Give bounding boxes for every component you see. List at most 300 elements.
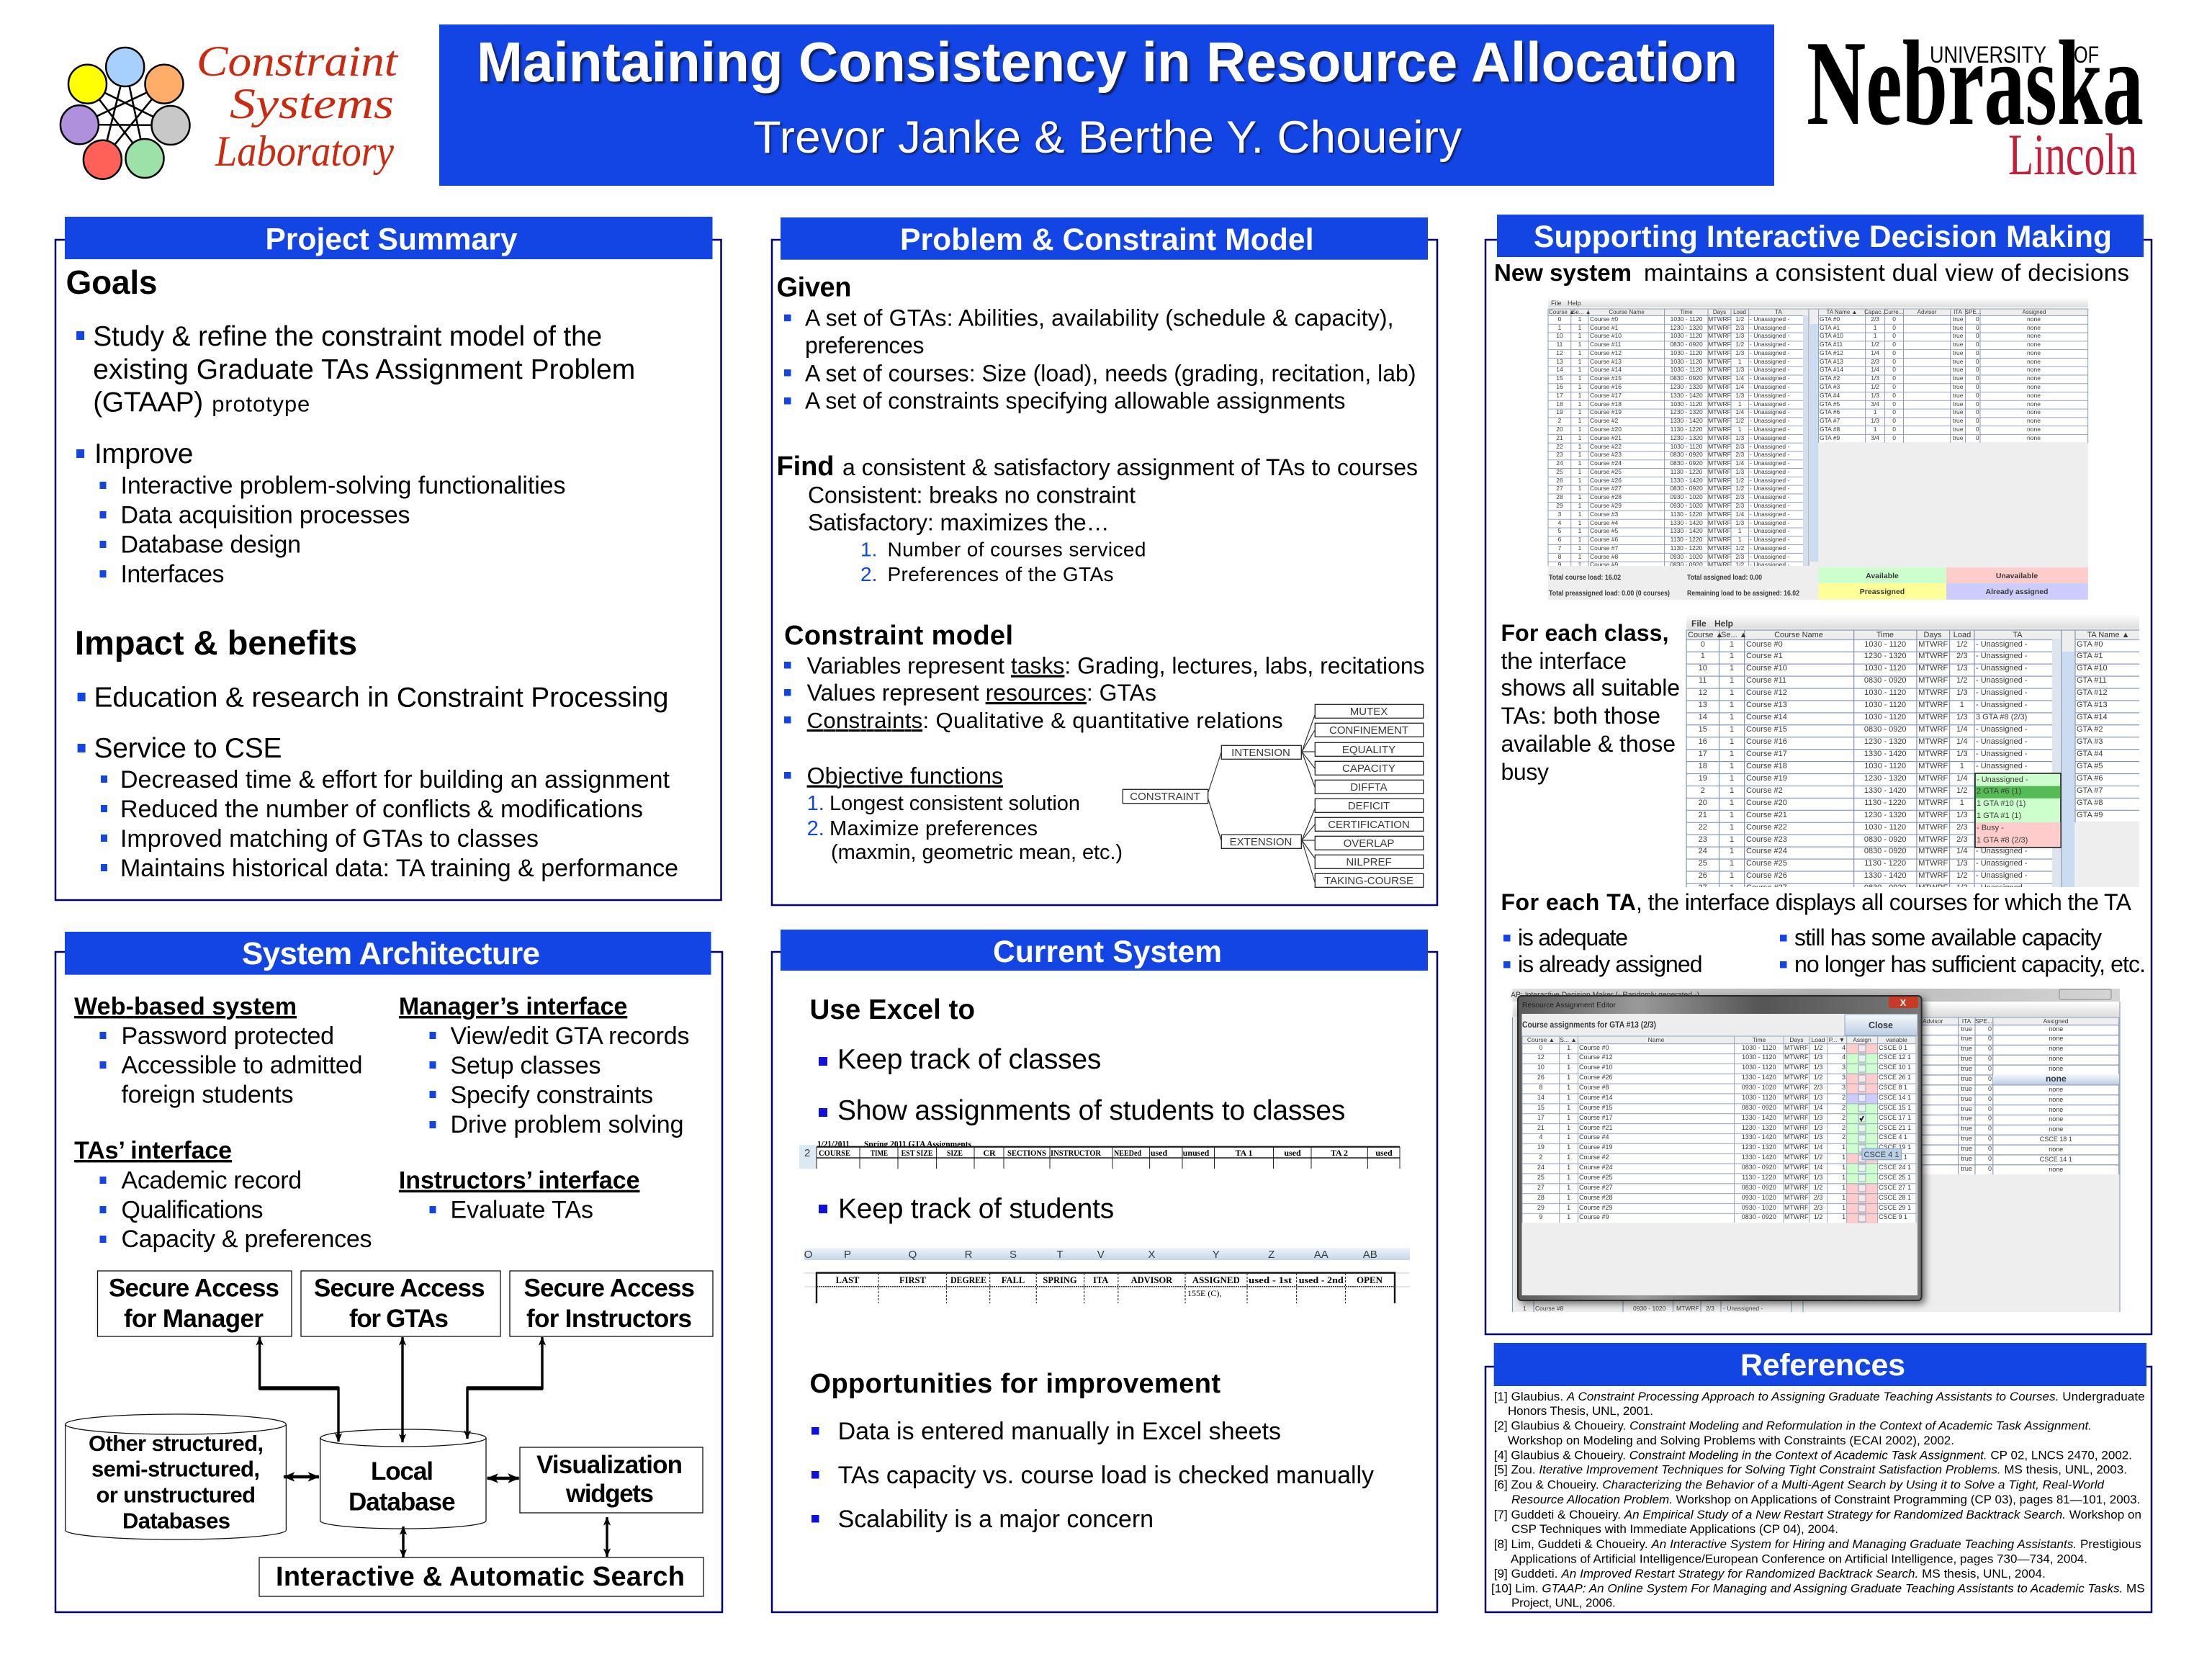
screenshot: dual view interface: Se... ▲	[1572, 309, 1591, 315]
dialog window: CSCE 0 1 CSCE 12 1 CSCE 10 1 CSCE 26 1 CSCE 8 1 CSCE 14 1 CSCE 15 1 CSCE 17 1 CSCE 21 1 CSCE 4 1 CSCE 19 1 CSCE 2 1 CSCE 24 1 CSCE 25 1 CSCE 27 1 CSCE 28 1 CSCE 29 1 CSCE 9 1	[1879, 1044, 1911, 1220]
legend: cell colours: Already assigned	[1986, 588, 2048, 596]
text block: constraint model: Variables represent tasks: Grading, lectures, labs, recitations	[807, 652, 1425, 678]
text block: constraint model: (maxmin, geometric mean, etc.)	[831, 841, 1123, 864]
reference list: Honors Thesis, UNL, 2001.	[1508, 1404, 1653, 1418]
dialog window: Load	[1812, 1036, 1825, 1043]
text: for each TA: still has some available capacity	[1794, 925, 2102, 950]
screenshot: course table with TA dropdown: TA Name ▲	[2087, 631, 2129, 639]
chart: constraint taxonomy tree: OVERLAP	[1344, 837, 1394, 850]
screenshot: excel sheet of students: Z	[1268, 1249, 1274, 1261]
text block: constraint model: Maximize preferences	[830, 817, 1038, 840]
screenshot: resource assignment editor: none none none none none none none none none none none CSCE 18 1 none CSCE 14 1 none	[2040, 1025, 2072, 1173]
text block: instructors' interface: Instructors’ interface	[399, 1167, 639, 1195]
text: for each TA: is adequate	[1518, 925, 1628, 950]
screenshot: excel sheet of students: P	[844, 1249, 851, 1261]
panel: references	[1485, 1343, 2152, 1612]
screenshot: dual view interface: 2/3 1 1 1/2 1/4 2/3 1/4 1/3 1/2 1/3 3/4 1 1/3 1 3/4	[1871, 315, 1879, 441]
screenshot: course table with TA dropdown: Course Name	[1774, 631, 1823, 639]
dialog window: 1 1 1 1 1 1 1 1 1 1 1 1 1 1 1 1 1 1	[1567, 1044, 1570, 1220]
reference list: Workshop on Modeling and Solving Problems with Constraints (ECAI 2002), 2002.	[1508, 1434, 1954, 1447]
screenshot: course table with TA dropdown: 0 1 10 11 12 13 14 15 16 17 18 19 2 20 21 22 23 24 25 26 27	[1699, 639, 1707, 887]
text block: given: preferences	[805, 333, 925, 359]
dialog window: Course assignments for GTA #13 (2/3)	[1522, 1021, 1656, 1030]
screenshot: dual view interface	[1548, 297, 2088, 600]
screenshot: dual view interface: File	[1551, 300, 1562, 307]
chart: constraint taxonomy tree	[1123, 704, 1424, 887]
text block: goals: existing Graduate TAs Assignment Problem	[93, 354, 635, 385]
screenshot: course table with TA dropdown: GTA #0 GTA #1 GTA #10 GTA #11 GTA #12 GTA #13 GTA #14 GTA #2 GTA #3 GTA #4 GTA #5 GTA #6 GTA #7 GTA #8 GTA #9	[2077, 639, 2108, 819]
screenshot: excel sheet of students: O	[804, 1249, 812, 1261]
box: secure access for manager: Secure Access	[109, 1274, 279, 1303]
reference list: Project, UNL, 2006.	[1511, 1596, 1616, 1610]
screenshot: course table with TA dropdown: Days	[1923, 631, 1942, 639]
screenshot: course table with TA dropdown: File	[1691, 619, 1707, 629]
text block: goals	[66, 264, 635, 588]
text block: impact and benefits: Education & research in Constraint Processing	[94, 683, 668, 713]
text block: find: a consistent & satisfactory assignment of TAs to courses	[842, 454, 1418, 480]
text: keep track of students: Keep track of students	[838, 1194, 1114, 1225]
text block: TAs interface: Capacity & preferences	[121, 1226, 372, 1253]
reference list: [9] Guddeti. An Improved Restart Strategy for Randomized Backtrack Search. MS thesis, UNL, 2004.	[1494, 1567, 2046, 1581]
cylinder: other databases: or unstructured	[96, 1483, 256, 1508]
text block: goals: Improve	[94, 439, 193, 469]
screenshot: course table with TA dropdown: 1030 - 1120 1230 - 1320 1030 - 1120 0830 - 0920 1030 - 1120 1030 - 1120 1030 - 1120 0830 - 0920 1230 - 1320 1330 - 1420 1030 - 1120 1230 - 1320 1330 - 1420 1130 - 1220 1230 - 1320 1030 - 1120 0830 - 0920 0830 - 0920 1130 - 1220 1330 - 1420 0830 - 0920	[1864, 639, 1907, 887]
text block: goals: Interfaces	[121, 561, 225, 588]
text block: web-based system: Password protected	[121, 1022, 334, 1050]
screenshot: resource assignment editor: MTWRF	[1676, 1305, 1699, 1312]
dialog window: variable	[1886, 1036, 1907, 1043]
text block: impact and benefits: Service to CSE	[94, 733, 282, 764]
panel: system architecture	[55, 932, 722, 1612]
screenshot: resource assignment editor	[1511, 989, 2120, 1312]
lab name: Constraint	[197, 37, 398, 85]
screenshot: resource assignment editor: 2/3	[1706, 1305, 1714, 1312]
reference list: [4] Glaubius & Choueiry. Constraint Modeling in the Context of Academic Task Assignment. CP 02, LNCS 2470, 2002.	[1494, 1449, 2132, 1462]
screenshot: dual view interface: ITA	[1954, 309, 1963, 315]
panel: current system	[772, 930, 1437, 1612]
text block: find: Find	[776, 451, 834, 482]
screenshot: dual view interface: Total assigned load: 0.00	[1687, 573, 1762, 582]
text block: goals: (GTAAP)	[93, 387, 203, 418]
text: for each class: available & those	[1501, 731, 1676, 757]
box: interactive and automatic search: Interactive & Automatic Search	[276, 1562, 685, 1592]
text block: given	[776, 273, 1416, 414]
text: for each class: shows all suitable	[1501, 675, 1680, 701]
text block: constraint model: 1.	[807, 792, 824, 815]
chart: constraint taxonomy tree: EXTENSION	[1230, 836, 1292, 848]
text block: manager's interface: Specify constraints	[451, 1082, 653, 1109]
text block: opportunities for improvement: Scalability is a major concern	[838, 1506, 1154, 1533]
chart: constraint taxonomy tree: CAPACITY	[1342, 763, 1395, 775]
chart: constraint taxonomy tree: DEFICIT	[1348, 800, 1390, 812]
screenshot: dual view interface: none none none none none none none none none none none none none none none	[2027, 315, 2041, 441]
reference list: [8] Lim, Guddeti & Choueiry. An Interactive System for Hiring and Managing Graduate Teaching Assistants. Prestigious	[1494, 1537, 2141, 1551]
screenshot: dual view interface: 0 0 0 0 0 0 0 0 0 0 0 0 0 0 0	[1892, 315, 1896, 441]
chart: constraint taxonomy tree: TAKING-COURSE	[1324, 875, 1413, 887]
text: for each TA: no longer has sufficient capacity, etc.	[1794, 951, 2146, 977]
box: secure access for GTAs	[301, 1271, 500, 1336]
logo: university of nebraska lincoln	[1807, 15, 2144, 187]
screenshot: excel sheet of classes: TIME	[871, 1148, 888, 1158]
text block: TAs interface	[74, 1137, 372, 1253]
screenshot: dual view interface: true true true true true true true true true true true true true true true	[1953, 315, 1964, 441]
text block: manager's interface: View/edit GTA records	[451, 1022, 690, 1050]
lab name: Laboratory	[215, 127, 394, 175]
reference list: [6] Zou & Choueiry. Characterizing the Behavior of a Multi-Agent Search by Using it to Solve a Tight, Real-World	[1494, 1478, 2105, 1492]
screenshot: dual view interface: Course ▲	[1549, 309, 1575, 315]
screenshot: course table with TA dropdown: Time	[1876, 631, 1894, 639]
box: secure access for GTAs: for GTAs	[349, 1305, 449, 1333]
screenshot: resource assignment editor: 1	[1523, 1305, 1527, 1312]
text block: web-based system: Accessible to admitted	[121, 1052, 363, 1079]
reference list: [2] Glaubius & Choueiry. Constraint Modeling and Reformulation in the Context of Academic Task Assignment.	[1494, 1419, 2092, 1433]
text block: opportunities for improvement: TAs capacity vs. course load is checked manually	[838, 1462, 1374, 1489]
screenshot: dual view interface: MTWRF MTWRF MTWRF MTWRF MTWRF MTWRF MTWRF MTWRF MTWRF MTWRF MTWRF MTWRF MTWRF MTWRF MTWRF MTWRF MTWRF MTWRF MTWRF MTWRF MTWRF MTWRF MTWRF MTWRF MTWRF MTWRF MTWRF MTWRF MTWRF MTWRF	[1708, 315, 1731, 566]
text block: goals: Study & refine the constraint model of the	[93, 321, 602, 352]
box: visualization widgets: widgets	[565, 1480, 654, 1508]
heading: problem and constraint model: Problem & Constraint Model	[900, 223, 1313, 257]
screenshot: resource assignment editor: SPE...	[1975, 1017, 1992, 1025]
text block: manager's interface: Setup classes	[451, 1052, 601, 1079]
dialog window: 1030 - 1120 1030 - 1120 1030 - 1120 1330 - 1420 0930 - 1020 1030 - 1120 0830 - 0920 1330 - 1420 1230 - 1320 1330 - 1420 1230 - 1320 1330 - 1420 0830 - 0920 1130 - 1220 0830 - 0920 0930 - 1020 0930 - 1020 0830 - 0920	[1742, 1044, 1776, 1220]
screenshot: excel sheet of students: T	[1056, 1249, 1064, 1261]
reference list	[1491, 1390, 2145, 1610]
text block: find: 2.	[860, 563, 877, 585]
screenshot: dual view interface: 1/2 2/3 1/3 1/2 1/3 1 1/3 1/4 1/4 1/3 1 1/4 1/2 1 1/3 2/3 2/3 1/4 1/3 1/2 1/2 2/3 2/3 1/4 1/3 1 1 1/2 2/3 1/2	[1735, 315, 1744, 566]
text block: goals: prototype	[212, 392, 310, 417]
screenshot: excel sheet of classes: used	[1151, 1148, 1167, 1158]
screenshot: excel sheet of classes: COURSE	[819, 1148, 850, 1158]
text: for each class: TAs: both those	[1501, 703, 1660, 729]
screenshot: dual view interface: Course #0 Course #1 Course #10 Course #11 Course #12 Course #13 Course #14 Course #15 Course #16 Course #17 Course #18 Course #19 Course #2 Course #20 Course #21 Course #22 Course #23 Course #24 Course #25 Course #26 Course #27 Course #28 Course #29 Course #3 Course #4 Course #5 Course #6 Course #7 Course #8 Course #9	[1590, 315, 1622, 566]
text block: impact and benefits	[75, 624, 678, 882]
dialog window: Close	[1869, 1020, 1893, 1030]
diagram: system architecture flow	[66, 1271, 713, 1596]
screenshot: excel sheet of classes: INSTRUCTOR	[1051, 1148, 1101, 1158]
screenshot: dual view interface: Assigned	[2023, 309, 2046, 315]
screenshot: excel sheet of students: AB	[1363, 1249, 1377, 1261]
panel: problem and constraint model	[772, 217, 1437, 905]
screenshot: dual view interface: 1030 - 1120 1230 - 1320 1030 - 1120 0830 - 0920 1030 - 1120 1030 - 1120 1030 - 1120 0830 - 0920 1230 - 1320 1330 - 1420 1030 - 1120 1230 - 1320 1330 - 1420 1130 - 1220 1230 - 1320 1030 - 1120 0830 - 0920 0830 - 0920 1130 - 1220 1330 - 1420 0830 - 0920 0930 - 1020 0930 - 1020 1130 - 1220 1330 - 1420 1330 - 1420 1130 - 1220 1130 - 1220 0930 - 1020 0830 - 0920	[1670, 315, 1703, 566]
screenshot: excel sheet of students: ITA	[1093, 1275, 1108, 1285]
dialog window: 4 4 3 3 3 2 2 2 2 2 1 1 1 1 1 1 1 1	[1842, 1044, 1845, 1220]
text block: impact and benefits: Reduced the number of conflicts & modifications	[120, 796, 643, 823]
box: secure access for instructors: Secure Access	[524, 1274, 695, 1303]
text block: find: Consistent: breaks no constraint	[808, 482, 1136, 508]
heading: system architecture: System Architecture	[242, 936, 540, 971]
text block: use excel: Keep track of classes	[837, 1044, 1101, 1075]
box: secure access for GTAs: Secure Access	[314, 1274, 485, 1303]
screenshot: excel sheet of students: FIRST	[899, 1275, 926, 1285]
cylinder: local database	[320, 1429, 486, 1529]
screenshot: excel sheet of classes: used	[1284, 1148, 1301, 1158]
screenshot: dual view interface: Load	[1733, 309, 1746, 315]
cylinder: local database: Local	[371, 1457, 433, 1485]
text: for each class: For each class,	[1501, 620, 1669, 646]
dialog window	[1518, 996, 1922, 1300]
screenshot: dual view interface: Remaining load to be assigned: 16.02	[1687, 589, 1799, 598]
text block: constraint model: Constraints: Qualitative & quantitative relations	[807, 708, 1283, 733]
title: Maintaining Consistency in Resource Allocation	[477, 30, 1737, 94]
text block: use excel: Use Excel to	[809, 994, 975, 1025]
screenshot: dual view interface: TA Name ▲	[1827, 309, 1857, 315]
legend: cell colours: Unavailable	[1996, 572, 2038, 580]
screenshot: excel sheet of students: Y	[1213, 1249, 1220, 1261]
screenshot: course table with TA dropdown: Load	[1954, 631, 1971, 639]
box: secure access for instructors	[510, 1271, 713, 1336]
screenshot: excel sheet of students: V	[1097, 1249, 1105, 1261]
screenshot: dual view interface: - Unassigned - - Unassigned - - Unassigned - - Unassigned - - Unassigned - - Unassigned - - Unassigned - - Unassigned - - Unassigned - - Unassigned - - Unassigned - - Unassigned - - Unassigned - - Unassigned - - Unassigned - - Unassigned - - Unassigned - - Unassigned - - Unassigned - - Unassigned - - Unassigned - - Unassigned - - Unassigned - - Unassigned - - Unassigned - - Unassigned - - Unassigned - - Unassigned - - Unassigned - - Unassigned -	[1750, 315, 1789, 566]
text block: given: Given	[776, 273, 851, 303]
screenshot: dual view interface: SPE...	[1965, 309, 1981, 315]
screenshot: course table with TA dropdown: Course ▲	[1688, 631, 1723, 639]
title banner	[439, 24, 1774, 186]
screenshot: dual view interface: Curre...	[1884, 309, 1903, 315]
screenshot: dual view interface: Help	[1568, 300, 1581, 307]
screenshot: dual view interface: 1 1 1 1 1 1 1 1 1 1 1 1 1 1 1 1 1 1 1 1 1 1 1 1 1 1 1 1 1 1	[1578, 315, 1581, 566]
authors: Trevor Janke & Berthe Y. Choueiry	[753, 112, 1462, 163]
screenshot: excel sheet of classes: CR	[983, 1148, 996, 1158]
text block: opportunities for improvement	[809, 1369, 1374, 1533]
screenshot: course table with TA dropdown: 1/2 2/3 1/3 1/2 1/3 1 1/3 1/4 1/4 1/3 1 1/4 1/2 1 1/3 2/3 2/3 1/4 1/3 1/2 1/2	[1956, 639, 1967, 887]
screenshot: excel sheet of classes: NEEDed	[1114, 1148, 1141, 1158]
text: dual view intro: New system	[1494, 259, 1632, 286]
text block: find: Number of courses serviced	[887, 539, 1146, 561]
text block: opportunities for improvement: Opportunities for improvement	[809, 1369, 1220, 1399]
text block: impact and benefits: Improved matching of GTAs to classes	[120, 825, 539, 853]
text block: find: Preferences of the GTAs	[887, 563, 1113, 585]
panel: supporting interactive decision making	[1485, 215, 2152, 1334]
text block: use excel: Show assignments of students to classes	[837, 1095, 1345, 1126]
legend: cell colours: Preassigned	[1860, 588, 1905, 596]
text: dual view intro: maintains a consistent dual view of decisions	[1644, 259, 2129, 286]
text block: goals: Database design	[121, 531, 301, 559]
text block: instructors' interface	[399, 1167, 639, 1224]
text block: manager's interface: Manager’s interface	[399, 993, 627, 1020]
text block: use excel	[809, 994, 1345, 1126]
chart: constraint taxonomy tree: INTENSION	[1231, 747, 1290, 759]
text block: goals: Data acquisition processes	[121, 502, 410, 529]
screenshot: dual view interface: Course Name	[1609, 309, 1645, 315]
screenshot: excel sheet of classes: used	[1375, 1148, 1393, 1158]
chart: constraint taxonomy tree: CONSTRAINT	[1130, 791, 1200, 803]
screenshot: excel sheet of students: used - 1st	[1249, 1275, 1292, 1285]
assign column cell colours	[1847, 1043, 1878, 1223]
heading: references: References	[1740, 1348, 1905, 1382]
screenshot: excel sheet of students: SPRING	[1043, 1275, 1077, 1285]
logo: university of nebraska lincoln: Lincoln	[2008, 122, 2137, 187]
screenshot: course table with TA dropdown: Se... ▲	[1721, 631, 1748, 639]
box: secure access for manager: for Manager	[124, 1305, 264, 1333]
screenshot: excel sheet of students: Q	[909, 1249, 917, 1261]
dialog window: Days	[1789, 1036, 1804, 1043]
box: visualization widgets: Visualization	[536, 1451, 683, 1479]
screenshot: excel sheet of students: S	[1010, 1249, 1017, 1261]
dialog window: Name	[1648, 1036, 1665, 1043]
screenshot: excel sheet of students: ADVISOR	[1131, 1275, 1173, 1285]
text block: web-based system: foreign students	[121, 1082, 294, 1109]
screenshot: resource assignment editor: AP: Interactive Decision Maker (- Randomly generated -)	[1511, 991, 1699, 999]
text block: constraint model	[784, 621, 1425, 864]
screenshot: excel sheet of students: used - 2nd	[1299, 1275, 1344, 1285]
panel: project summary	[55, 217, 721, 900]
screenshot: excel sheet of classes: SIZE	[947, 1148, 963, 1158]
icon: constraint graph of seven coloured nodes	[60, 48, 190, 179]
reference list: CSP Techniques with Immediate Applications (CP 04), 2004.	[1511, 1522, 1838, 1536]
screenshot: excel sheet of classes: 2	[804, 1147, 810, 1159]
dialog window: 1/2 1/3 1/3 1/2 2/3 1/3 1/4 1/3 1/3 1/3 1/4 1/2 1/4 1/3 1/2 2/3 2/3 1/2	[1814, 1044, 1822, 1220]
dialog window: Time	[1753, 1036, 1766, 1043]
text block: find: Satisfactory: maximizes the…	[808, 510, 1110, 536]
screenshot: dual view interface: 0 0 0 0 0 0 0 0 0 0 0 0 0 0 0	[1976, 315, 1979, 441]
text: for each TA: is already assigned	[1518, 951, 1702, 977]
text block: given: A set of GTAs: Abilities, availability (schedule & capacity),	[805, 305, 1394, 331]
screenshot: excel sheet of students: FALL	[1002, 1275, 1025, 1285]
text block: TAs interface: Academic record	[121, 1167, 302, 1195]
screenshot: resource assignment editor: Advisor	[1923, 1017, 1943, 1025]
screenshot: excel sheet of students: AA	[1314, 1249, 1328, 1261]
screenshot: course table with TA dropdown: Course #0 Course #1 Course #10 Course #11 Course #12 Course #13 Course #14 Course #15 Course #16 Course #17 Course #18 Course #19 Course #2 Course #20 Course #21 Course #22 Course #23 Course #24 Course #25 Course #26 Course #27	[1746, 639, 1787, 887]
chart: constraint taxonomy tree: MUTEX	[1350, 706, 1388, 718]
text block: given: A set of courses: Size (load), needs (grading, recitation, lab)	[805, 360, 1416, 386]
text block: manager's interface	[399, 993, 690, 1138]
text: for each class	[1501, 620, 1680, 785]
screenshot: excel sheet of classes: TA 2	[1331, 1148, 1348, 1158]
screenshot: excel sheet of students: LAST	[836, 1275, 860, 1285]
text block: TAs interface: Qualifications	[121, 1197, 264, 1224]
text block: constraint model: Objective functions	[807, 763, 1003, 789]
screenshot: dual view interface: Total preassigned load: 0.00 (0 courses)	[1549, 589, 1670, 598]
text block: web-based system: Web-based system	[74, 993, 297, 1020]
screenshot: course table with TA dropdown: MTWRF MTWRF MTWRF MTWRF MTWRF MTWRF MTWRF MTWRF MTWRF MTWRF MTWRF MTWRF MTWRF MTWRF MTWRF MTWRF MTWRF MTWRF MTWRF MTWRF MTWRF	[1918, 639, 1948, 887]
dialog window: Assign	[1853, 1036, 1871, 1043]
screenshot: resource assignment editor: 0 0 0 0 0 0 0 0 0 0 0 0 0 0 0	[1988, 1025, 1992, 1172]
dialog window: Course #0 Course #12 Course #10 Course #26 Course #8 Course #14 Course #15 Course #17 Course #21 Course #4 Course #19 Course #2 Course #24 Course #25 Course #27 Course #28 Course #29 Course #9	[1579, 1044, 1613, 1220]
dialog window: MTWRF MTWRF MTWRF MTWRF MTWRF MTWRF MTWRF MTWRF MTWRF MTWRF MTWRF MTWRF MTWRF MTWRF MTWRF MTWRF MTWRF MTWRF	[1784, 1044, 1809, 1220]
text block: constraint model: Values represent resources: GTAs	[807, 680, 1156, 706]
screenshot: excel sheet of classes: TA 1	[1235, 1148, 1253, 1158]
dialog window: Course ▲	[1527, 1036, 1555, 1043]
screenshot: dual view interface: Time	[1680, 309, 1693, 315]
cylinder: other databases: semi-structured,	[91, 1457, 260, 1482]
chart: constraint taxonomy tree: DIFFTA	[1350, 781, 1388, 793]
text block: goals: Interactive problem-solving functionalities	[121, 472, 566, 500]
chart: constraint taxonomy tree: EQUALITY	[1342, 744, 1395, 756]
cylinder: other databases	[66, 1414, 286, 1539]
chart: constraint taxonomy tree: CERTIFICATION	[1328, 819, 1410, 831]
screenshot: excel sheet of classes: EST SIZE	[902, 1148, 933, 1158]
box: secure access for instructors: for Instructors	[526, 1305, 692, 1333]
legend: cell colours	[1819, 567, 2088, 600]
text block: impact and benefits: Maintains historical data: TA training & performance	[120, 855, 678, 882]
screenshot: excel sheet of students: DEGREE	[950, 1275, 986, 1285]
logo: university of nebraska lincoln: OF	[2074, 42, 2099, 68]
lab name: Systems	[230, 80, 394, 127]
screenshot: resource assignment editor: Course #8	[1535, 1305, 1563, 1312]
reference list: [5] Zou. Iterative Improvement Techniques for Solving Tight Constraint Satisfaction Problems. MS thesis, UNL, 2003.	[1494, 1463, 2127, 1477]
dialog window: 0 12 10 26 8 14 15 17 21 4 19 2 24 25 27 28 29 9	[1537, 1044, 1545, 1220]
text block: goals: Goals	[66, 264, 157, 301]
text block: opportunities for improvement: Data is entered manually in Excel sheets	[838, 1418, 1281, 1445]
text block: impact and benefits: Impact & benefits	[75, 624, 357, 662]
text: for each TA: For each TA	[1501, 889, 1636, 915]
screenshot: excel sheet of students: ASSIGNED	[1192, 1275, 1240, 1285]
box: secure access for manager	[98, 1271, 292, 1336]
text block: impact and benefits: Decreased time & effort for building an assignment	[120, 766, 670, 793]
lab name	[197, 37, 398, 175]
dropdown: suitable and busy TAs: - Unassigned - 2 GTA #6 (1) 1 GTA #10 (1) 1 GTA #1 (1) - Busy - 1 GTA #8 (2/3)	[1977, 775, 2028, 845]
reference list: [7] Guddeti & Choueiry. An Empirical Study of a New Restart Strategy for Randomized Backtrack Search. Workshop on	[1494, 1508, 2141, 1521]
dialog window: S... ▲	[1560, 1036, 1577, 1043]
text: for each class: the interface	[1501, 648, 1627, 674]
logo: constraint systems laboratory	[60, 37, 398, 179]
text: for each TA: , the interface displays all courses for which the TA	[1636, 889, 2132, 915]
screenshot: excel sheet of students: X	[1148, 1249, 1155, 1261]
checkboxes	[1858, 1045, 1866, 1222]
arrows: data flow between components	[259, 1337, 607, 1557]
tooltip: CSCE 4 1	[1864, 1151, 1899, 1159]
screenshot: resource assignment editor: - Unassigned -	[1723, 1305, 1763, 1312]
text block: find: 1.	[860, 539, 877, 561]
screenshot: resource assignment editor: ITA	[1962, 1017, 1972, 1025]
dropdown: suitable and busy TAs	[1975, 773, 2061, 848]
box: visualization widgets	[520, 1447, 703, 1513]
heading: project summary: Project Summary	[265, 223, 518, 257]
cylinder: other databases: Other structured,	[89, 1431, 264, 1456]
text block: web-based system	[74, 993, 362, 1109]
tooltip	[1862, 1148, 1901, 1160]
heading: supporting interactive decision making: Supporting Interactive Decision Making	[1534, 220, 2112, 254]
reference list: Applications of Artificial Intelligence/European Conference on Artificial Intelligence, pages 730—734, 2004.	[1511, 1552, 2087, 1566]
screenshot: course table with TA dropdown: TA	[2013, 631, 2023, 639]
cylinder: other databases: Databases	[122, 1509, 230, 1534]
legend: cell colours: Available	[1866, 572, 1899, 580]
screenshot: excel sheet of classes	[799, 1132, 1400, 1169]
screenshot: course table with TA dropdown	[1686, 614, 2139, 887]
screenshot: resource assignment editor: Assigned	[2044, 1017, 2069, 1025]
screenshot: dual view interface: Days	[1713, 309, 1726, 315]
text: for each class: busy	[1501, 759, 1549, 785]
reference list: Resource Allocation Problem. Workshop on Applications of Constraint Programming (CP 03), pages 81—101, 2003.	[1511, 1493, 2140, 1506]
screenshot: dual view interface: Advisor	[1917, 309, 1937, 315]
screenshot: dual view interface: Total course load: 16.02	[1549, 573, 1621, 582]
text block: constraint model: Longest consistent solution	[830, 792, 1080, 815]
screenshot: excel sheet of classes: Spring 2011 GTA Assignments	[864, 1138, 971, 1149]
screenshot: excel sheet of students: 155E (C),	[1187, 1288, 1221, 1298]
reference list: [1] Glaubius. A Constraint Processing Approach to Assigning Graduate Teaching Assistants to Courses. Undergraduate	[1494, 1390, 2145, 1403]
screenshot: resource assignment editor: true true true true true true true true true true true true true true true	[1961, 1025, 1972, 1172]
reference list: [10] Lim. GTAAP: An Online System For Managing and Assigning Graduate Teaching Assistants to Academic Tasks. MS	[1491, 1582, 2145, 1596]
text block: constraint model: 2.	[807, 817, 824, 840]
dialog window: P... ▼	[1829, 1036, 1845, 1043]
screenshot: excel sheet of students: R	[965, 1249, 973, 1261]
screenshot: excel sheet of classes: unused	[1183, 1148, 1210, 1158]
screenshot: excel sheet of students: OPEN	[1357, 1275, 1382, 1285]
heading: current system: Current System	[993, 935, 1222, 969]
screenshot: dual view interface: Capac...	[1864, 309, 1886, 315]
screenshot: resource assignment editor: 0930 - 1020	[1633, 1305, 1666, 1312]
screenshot: excel sheet of students	[804, 1248, 1410, 1303]
text block: instructors' interface: Evaluate TAs	[451, 1197, 593, 1224]
text block: find	[776, 451, 1418, 585]
chart: constraint taxonomy tree: CONFINEMENT	[1329, 724, 1408, 737]
text block: given: A set of constraints specifying allowable assignments	[805, 388, 1345, 414]
screenshot: course table with TA dropdown: - Unassigned - - Unassigned - - Unassigned - - Unassigned - - Unassigned - - Unassigned - 3 GTA #8 (2/3) - Unassigned - - Unassigned - - Unassigned - - Unassigned - - Unassigned - - Unassigned - - Unassigned - - Unassigned -	[1976, 639, 2028, 887]
text: for each TA	[1501, 889, 2146, 977]
text block: manager's interface: Drive problem solving	[451, 1111, 684, 1138]
chart: constraint taxonomy tree: NILPREF	[1346, 856, 1392, 868]
screenshot: course table with TA dropdown: 1 1 1 1 1 1 1 1 1 1 1 1 1 1 1 1 1 1 1 1 1	[1730, 639, 1734, 887]
